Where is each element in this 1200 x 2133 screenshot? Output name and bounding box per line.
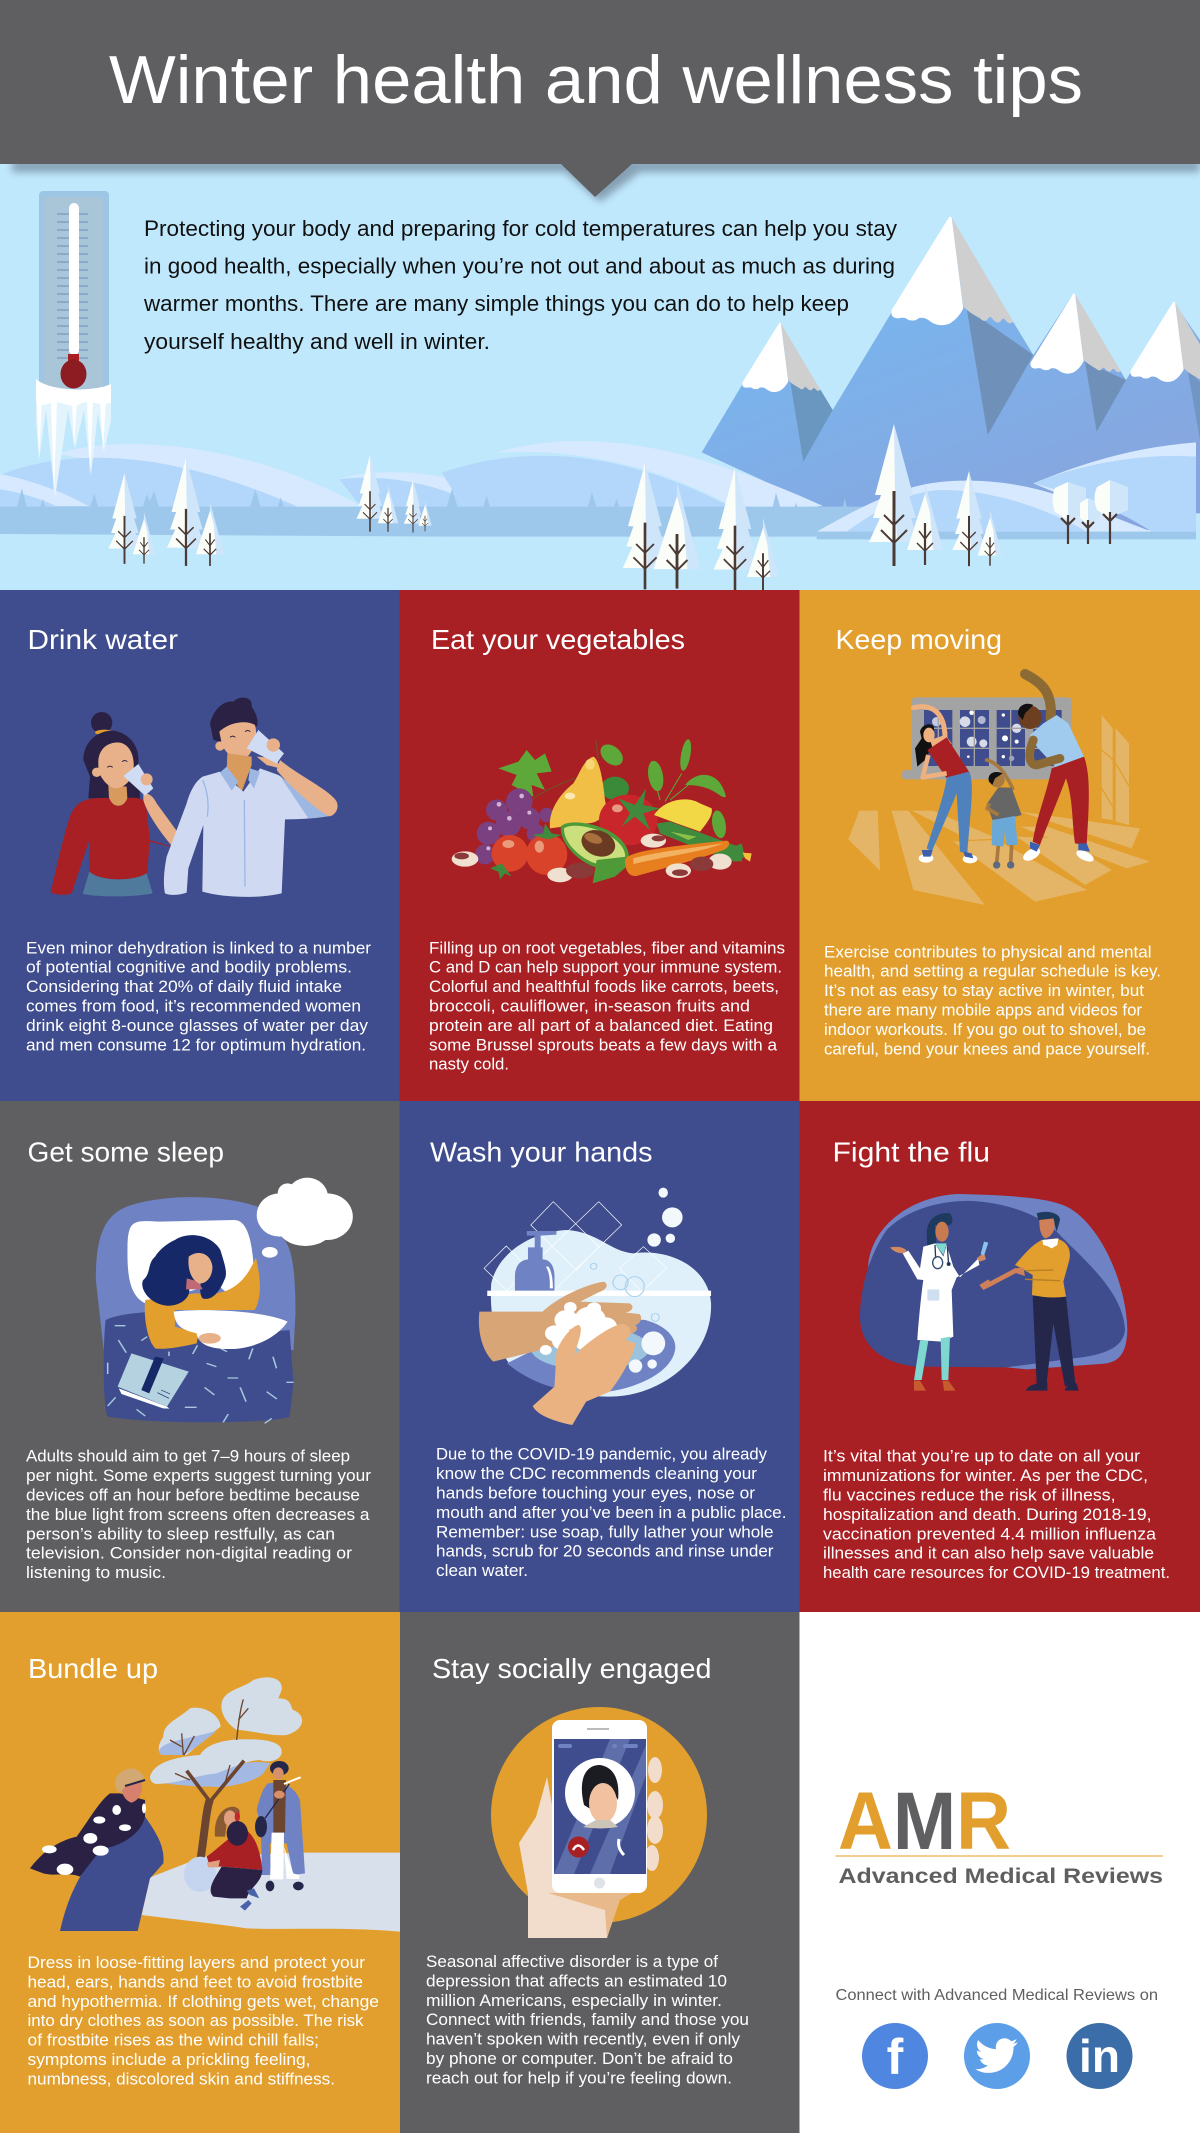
- panel: logo and social links: [800, 1612, 1200, 2133]
- text block: drink water: and men consume 12 for optimum hydration.: [26, 1036, 366, 1054]
- text block: stay socially engaged: [426, 1953, 749, 2087]
- logo: AMR: AMR: [838, 1776, 1011, 1867]
- snowy hills right: [772, 442, 1196, 539]
- heading: keep moving: Keep moving: [836, 624, 1002, 655]
- icon: facebook: [862, 2023, 928, 2089]
- text block: fight the flu: immunizations for winter. As per the CDC,: [823, 1467, 1148, 1485]
- intro paragraph: in good health, especially when you’re not out and about as much as during: [144, 254, 895, 278]
- text block: keep moving: It’s not as easy to stay active in winter, but: [824, 982, 1144, 1000]
- icon: linkedin: [1066, 2023, 1132, 2089]
- text block: get some sleep: Adults should aim to get 7–9 hours of sleep: [26, 1448, 350, 1466]
- text block: eat your vegetables: protein are all part of a balanced diet. Eating: [429, 1017, 773, 1035]
- connect text: Connect with Advanced Medical Reviews on: [836, 1987, 1158, 2004]
- icon: linkedin: in: [1079, 2030, 1120, 2082]
- text block: stay socially engaged: million Americans, especially in winter.: [426, 1992, 722, 2010]
- text block: wash your hands: mouth and after you’ve been in a public place.: [436, 1504, 786, 1522]
- text block: keep moving: there are many mobile apps and videos for: [824, 1002, 1143, 1020]
- text block: eat your vegetables: broccoli, cauliflower, in-season fruits and: [429, 998, 750, 1016]
- icon: frozen thermometer: [36, 191, 111, 498]
- text block: stay socially engaged: Connect with friends, family and those you: [426, 2011, 749, 2029]
- mountains: [702, 217, 1200, 530]
- text block: drink water: of potential cognitive and bodily problems.: [26, 959, 352, 977]
- heading: drink water: Drink water: [28, 624, 178, 655]
- text block: bundle up: into dry clothes as soon as possible. The risk: [28, 2012, 364, 2030]
- heading: wash your hands: Wash your hands: [430, 1136, 652, 1168]
- snowy hills left: [0, 441, 982, 537]
- intro paragraph: [143, 216, 897, 354]
- text block: eat your vegetables: some Brussel sprouts beats a few days with a: [429, 1036, 778, 1054]
- text block: eat your vegetables: [429, 939, 785, 1074]
- heading: fight the flu: Fight the flu: [832, 1136, 990, 1168]
- text block: fight the flu: flu vaccines reduce the risk of illness,: [823, 1486, 1116, 1504]
- text block: drink water: comes from food, it’s recommended women: [26, 998, 361, 1016]
- panel: wash your hands: [400, 1101, 800, 1612]
- text block: stay socially engaged: by phone or computer. Don’t be afraid to: [426, 2050, 733, 2068]
- icon: twitter: [964, 2023, 1030, 2089]
- text block: get some sleep: listening to music.: [26, 1564, 166, 1582]
- intro paragraph: warmer months. There are many simple things you can do to help keep: [143, 291, 849, 316]
- heading: eat your vegetables: Eat your vegetables: [431, 624, 685, 655]
- text block: keep moving: careful, bend your knees and pace yourself.: [824, 1040, 1150, 1058]
- logo: AMR: Advanced Medical Reviews: [838, 1865, 1163, 1888]
- text block: bundle up: Dress in loose-fitting layers and protect your: [28, 1954, 366, 1972]
- panel: winter scene background: [0, 160, 1200, 590]
- panel: keep moving: [800, 590, 1200, 1102]
- text block: bundle up: [28, 1954, 379, 2088]
- illustration: people bundled up in the cold: [30, 1677, 400, 1932]
- text block: keep moving: Exercise contributes to physical and mental: [824, 943, 1152, 961]
- text block: wash your hands: hands before touching your eyes, nose or: [436, 1484, 756, 1502]
- text block: drink water: drink eight 8-ounce glasses of water per day: [26, 1017, 369, 1035]
- text block: stay socially engaged: Seasonal affective disorder is a type of: [426, 1953, 718, 1971]
- illustration: vegetables and fruit: [452, 738, 752, 883]
- heading: stay socially engaged: Stay socially engaged: [432, 1653, 712, 1684]
- text block: wash your hands: [436, 1446, 786, 1580]
- text block: get some sleep: television. Consider non-digital reading or: [26, 1545, 353, 1563]
- heading: bundle up: Bundle up: [28, 1653, 158, 1684]
- text block: bundle up: numbness, discolored skin and stiffness.: [28, 2070, 335, 2088]
- text block: wash your hands: hands, scrub for 20 seconds and rinse under: [436, 1543, 774, 1561]
- illustration: doctor and patient: [860, 1194, 1127, 1391]
- text block: wash your hands: know the CDC recommends cleaning your: [436, 1465, 758, 1483]
- text block: fight the flu: It’s vital that you’re up to date on all your: [823, 1448, 1141, 1466]
- text block: eat your vegetables: nasty cold.: [429, 1056, 509, 1074]
- text block: fight the flu: health care resources for COVID-19 treatment.: [823, 1564, 1170, 1582]
- text block: fight the flu: hospitalization and death. During 2018-19,: [823, 1506, 1152, 1524]
- text block: fight the flu: illnesses and it can also help save valuable: [823, 1545, 1154, 1563]
- text block: get some sleep: the blue light from screens often decreases a: [26, 1506, 370, 1524]
- text block: get some sleep: [26, 1448, 372, 1582]
- text block: get some sleep: devices off an hour before bedtime because: [26, 1486, 360, 1504]
- text block: keep moving: [824, 943, 1161, 1058]
- intro paragraph: Protecting your body and preparing for cold temperatures can help you stay: [144, 216, 897, 241]
- logo: AMR: [836, 1776, 1163, 1888]
- text block: fight the flu: vaccination prevented 4.4 million influenza: [823, 1525, 1157, 1543]
- text block: eat your vegetables: Colorful and healthful foods like carrots, beets,: [429, 978, 779, 996]
- illustration: two people drinking water: [51, 698, 338, 897]
- text block: bundle up: head, ears, hands and feet to avoid frostbite: [28, 1973, 363, 1991]
- panel: fight the flu: [800, 1101, 1200, 1612]
- text block: wash your hands: clean water.: [436, 1562, 528, 1580]
- intro paragraph: yourself healthy and well in winter.: [144, 329, 490, 354]
- text block: drink water: Considering that 20% of daily fluid intake: [26, 978, 342, 996]
- title: Winter health and wellness tips: [109, 42, 1083, 118]
- panel: bundle up: [0, 1612, 400, 2133]
- text block: bundle up: symptoms include a prickling feeling,: [28, 2051, 310, 2069]
- text block: drink water: Even minor dehydration is linked to a number: [26, 939, 372, 957]
- text block: stay socially engaged: depression that affects an estimated 10: [426, 1972, 727, 1990]
- text block: wash your hands: Remember: use soap, fully lather your whole: [436, 1523, 774, 1541]
- text block: keep moving: health, and setting a regular schedule is key.: [824, 963, 1161, 981]
- text block: get some sleep: person’s ability to sleep restfully, as can: [26, 1525, 335, 1543]
- panel: get some sleep: [0, 1101, 400, 1612]
- illustration: hand holding phone on video call: [491, 1707, 707, 1938]
- text block: stay socially engaged: haven’t spoken with recently, even if only: [426, 2031, 741, 2049]
- panel: drink water: [0, 590, 400, 1102]
- text block: wash your hands: Due to the COVID-19 pandemic, you already: [436, 1446, 768, 1464]
- text block: bundle up: and hypothermia. If clothing gets wet, change: [28, 1993, 379, 2011]
- panel: eat your vegetables: [400, 590, 800, 1102]
- text block: bundle up: of frostbite rises as the wind chill falls;: [28, 2032, 319, 2050]
- panel: stay socially engaged: [400, 1612, 800, 2133]
- header banner: [0, 0, 1200, 202]
- snow covered trees: [108, 424, 1128, 590]
- text block: keep moving: indoor workouts. If you go out to shovel, be: [824, 1021, 1146, 1039]
- heading: get some sleep: Get some sleep: [28, 1136, 224, 1168]
- text block: get some sleep: per night. Some experts suggest turning your: [26, 1467, 372, 1485]
- icon: facebook: f: [887, 2029, 904, 2085]
- text block: fight the flu: [823, 1448, 1170, 1582]
- text block: eat your vegetables: C and D can help support your immune system.: [429, 959, 782, 977]
- text block: drink water: [26, 939, 372, 1054]
- illustration: washing hands with soap: [479, 1188, 711, 1425]
- illustration: family stretching: [848, 674, 1150, 905]
- text block: eat your vegetables: Filling up on root vegetables, fiber and vitamins: [429, 939, 785, 957]
- text block: stay socially engaged: reach out for help if you’re feeling down.: [426, 2069, 732, 2087]
- illustration: woman sleeping in bed: [96, 1178, 353, 1423]
